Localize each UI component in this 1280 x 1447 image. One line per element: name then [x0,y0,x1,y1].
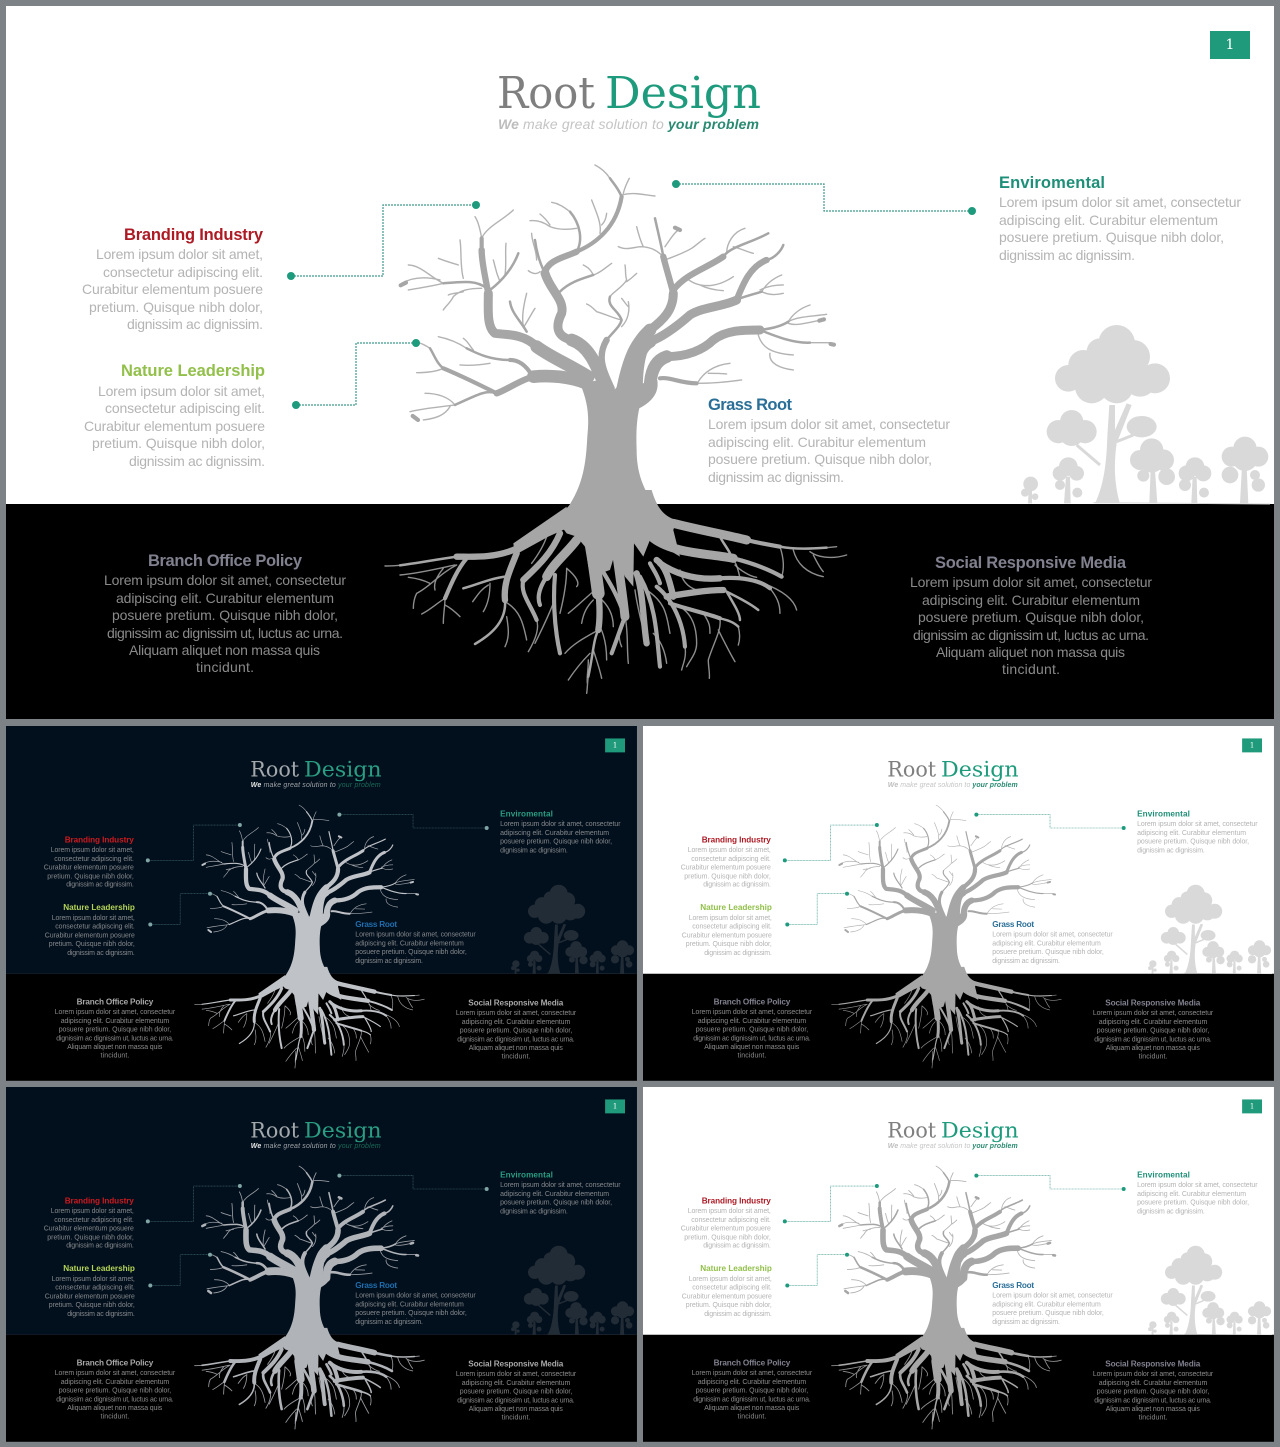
text block: Social Responsive Media: tincidunt. [502,1053,531,1060]
text block: Nature Leadership: consectetur adipiscing elit. [55,1285,135,1292]
text block: Grass Root: Lorem ipsum dolor sit amet, consectetur [355,1292,476,1299]
text block: Enviromental [1137,1171,1258,1215]
text block: Social Responsive Media: Aliquam aliquet non massa quis [469,1045,563,1052]
text block: Social Responsive Media: adipiscing elit. Curabitur elementum [462,1019,570,1026]
text block: Grass Root: adipiscing elit. Curabitur elementum [708,434,926,450]
text block: Nature Leadership: consectetur adipiscing elit. [105,400,265,416]
text block: Grass Root: adipiscing elit. Curabitur elementum [992,940,1101,947]
text block: Branch Office Policy [692,998,813,1059]
text block: Branch Office Policy: Branch Office Policy [148,552,303,570]
text block: Branding Industry: dignissim ac dignissim. [66,882,134,889]
text block: Branding Industry: dignissim ac dignissim. [127,316,263,332]
text block: Nature Leadership: Curabitur elementum posuere [84,418,265,434]
text block: Nature Leadership: Nature Leadership [63,903,135,912]
slide 5: white thumbnail, thick tree [643,1087,1274,1442]
text block: Nature Leadership: Curabitur elementum posuere [682,1293,772,1300]
page number badge: 1 [613,741,617,749]
text block: Social Responsive Media: posuere pretium. Quisque nibh dolor, [918,609,1144,625]
text block: Enviromental: Lorem ipsum dolor sit amet, consectetur [999,194,1241,210]
black soil band [6,1335,637,1442]
text block: Grass Root: dignissim ac dignissim. [355,1319,423,1326]
subtitle: We make great solution to your problem [251,1143,381,1150]
text block: Nature Leadership: Lorem ipsum dolor sit amet, [689,915,772,922]
title: Root [887,1119,936,1144]
text block: Grass Root: posuere pretium. Quisque nibh dolor, [992,949,1104,956]
connector: Branding Industry [146,1184,242,1223]
title: Design [605,68,761,119]
connector: Enviromental [974,1174,1126,1191]
text block: Nature Leadership: Lorem ipsum dolor sit amet, [98,383,265,399]
text block: Branding Industry: dignissim ac dignissim. [703,882,771,889]
title: Design [304,1119,382,1144]
text block: Enviromental [500,810,621,854]
text block: Branding Industry: Lorem ipsum dolor sit amet, [688,1208,771,1215]
text block: Branch Office Policy: Lorem ipsum dolor sit amet, consectetur [55,1370,176,1377]
text block: Social Responsive Media: Lorem ipsum dolor sit amet, consectetur [1093,1010,1214,1017]
text block: Enviromental: dignissim ac dignissim. [1137,847,1205,854]
text block: Nature Leadership: pretium. Quisque nibh dolor, [92,435,265,451]
text block: Enviromental: posuere pretium. Quisque nibh dolor, [999,229,1224,245]
text block: Branding Industry [681,835,771,889]
slide 2: dark thumbnail, thin tree [6,726,637,1081]
text block: Social Responsive Media: Social Responsive Media [935,554,1127,572]
text block: Nature Leadership: pretium. Quisque nibh dolor, [49,941,135,948]
text block: Branding Industry: pretium. Quisque nibh dolor, [684,1234,771,1241]
text block: Enviromental: Enviromental [500,810,553,819]
text block: Social Responsive Media: tincidunt. [1139,1053,1168,1060]
text block: Grass Root: Lorem ipsum dolor sit amet, consectetur [355,931,476,938]
text block: Enviromental: posuere pretium. Quisque nibh dolor, [1137,1199,1249,1206]
text block: Branding Industry: dignissim ac dignissim. [703,1243,771,1250]
text block: Branding Industry: Lorem ipsum dolor sit amet, [688,847,771,854]
text block: Enviromental: adipiscing elit. Curabitur elementum [1137,830,1246,837]
text block: Branch Office Policy: Lorem ipsum dolor sit amet, consectetur [55,1009,176,1016]
text block: Branding Industry: Branding Industry [702,1196,771,1205]
text block: Branding Industry: pretium. Quisque nibh dolor, [47,873,134,880]
text block: Grass Root: adipiscing elit. Curabitur elementum [355,940,464,947]
text block: Social Responsive Media: tincidunt. [1139,1414,1168,1421]
text block: Grass Root: dignissim ac dignissim. [708,469,844,485]
text block: Grass Root: posuere pretium. Quisque nibh dolor, [708,451,932,467]
text block: Branding Industry: Lorem ipsum dolor sit amet, [96,246,263,262]
text block: Enviromental: Enviromental [500,1171,553,1180]
text block: Enviromental: posuere pretium. Quisque nibh dolor, [1137,838,1249,845]
text block: Nature Leadership: Curabitur elementum posuere [45,1293,135,1300]
text block: Nature Leadership [682,903,772,957]
text block: Social Responsive Media [910,554,1152,677]
text block: Nature Leadership: dignissim ac dignissim. [67,1311,135,1318]
text block: Branch Office Policy: tincidunt. [101,1413,129,1420]
text block: Social Responsive Media: tincidunt. [1002,661,1060,677]
slide background [6,1087,637,1335]
main tree with roots [385,165,847,693]
page number badge: 1 [1226,37,1234,53]
text block: Branding Industry: consectetur adipiscing elit. [103,264,263,280]
text block: Enviromental: Enviromental [1137,810,1190,819]
text block: Branding Industry: pretium. Quisque nibh dolor, [89,299,263,315]
text block: Branch Office Policy: adipiscing elit. Curabitur elementum [61,1018,169,1025]
text block: Grass Root [992,1281,1113,1326]
background small trees [511,885,635,974]
text block: Grass Root [992,920,1113,965]
text block: Grass Root: posuere pretium. Quisque nibh dolor, [992,1310,1104,1317]
text block: Branch Office Policy: Aliquam aliquet non massa quis [129,642,320,658]
text block: Branch Office Policy: tincidunt. [101,1052,129,1059]
text block: Grass Root: dignissim ac dignissim. [355,958,423,965]
text block: Enviromental: adipiscing elit. Curabitur elementum [999,212,1218,228]
text block: Branch Office Policy: adipiscing elit. Curabitur elementum [698,1379,806,1386]
text block: Branch Office Policy: Branch Office Policy [77,1359,154,1368]
text block: Branch Office Policy: dignissim ac dignissim ut, luctus ac urna. [693,1035,811,1042]
background small trees [1148,1246,1272,1335]
text block: Grass Root: Lorem ipsum dolor sit amet, consectetur [992,1292,1113,1299]
black soil band [643,974,1274,1081]
text block: Nature Leadership: Lorem ipsum dolor sit amet, [52,915,135,922]
text block: Social Responsive Media: Lorem ipsum dolor sit amet, consectetur [910,574,1152,590]
text block: Social Responsive Media: posuere pretium. Quisque nibh dolor, [460,1028,572,1035]
text block: Branding Industry: Lorem ipsum dolor sit amet, [51,1208,134,1215]
text block: Enviromental: dignissim ac dignissim. [1137,1208,1205,1215]
title: Root [887,758,936,783]
text block: Nature Leadership: pretium. Quisque nibh dolor, [686,941,772,948]
slide 1: large white slide [6,6,1274,719]
title: Root [497,68,595,119]
text block: Enviromental [500,1171,621,1215]
text block: Enviromental: dignissim ac dignissim. [500,1208,568,1215]
text block: Branch Office Policy: tincidunt. [738,1413,766,1420]
connector: Branding Industry [783,1184,879,1223]
text block: Social Responsive Media: Lorem ipsum dolor sit amet, consectetur [456,1010,577,1017]
text block: Grass Root: posuere pretium. Quisque nibh dolor, [355,949,467,956]
page number badge: 1 [1250,741,1254,749]
black soil band [643,1335,1274,1442]
text block: Nature Leadership: dignissim ac dignissim. [129,453,265,469]
subtitle: We make great solution to your problem [888,1143,1018,1150]
text block: Branch Office Policy: dignissim ac dignissim ut, luctus ac urna. [56,1035,174,1042]
title [887,758,1019,783]
title [497,68,761,119]
page number badge [605,738,625,752]
slide 3: white thumbnail, thin tree [643,726,1274,1081]
main tree with roots [832,805,1061,1068]
title [887,1119,1019,1144]
page number badge [605,1099,625,1113]
text block: Nature Leadership: dignissim ac dignissim. [704,950,772,957]
text block: Social Responsive Media: Aliquam aliquet non massa quis [469,1406,563,1413]
text block: Nature Leadership: Curabitur elementum posuere [682,932,772,939]
text block: Enviromental: Lorem ipsum dolor sit amet, consectetur [500,821,621,828]
text block: Nature Leadership: Curabitur elementum posuere [45,932,135,939]
text block: Branch Office Policy: dignissim ac dignissim ut, luctus ac urna. [56,1396,174,1403]
main tree with roots [832,1166,1061,1429]
title: Design [304,758,382,783]
main tree with roots [195,1166,424,1429]
connector: Enviromental [337,813,489,830]
text block: Branch Office Policy: Branch Office Policy [714,998,791,1007]
text block: Social Responsive Media [456,999,577,1060]
text block: Enviromental: Lorem ipsum dolor sit amet, consectetur [1137,1182,1258,1189]
text block: Branch Office Policy: Lorem ipsum dolor sit amet, consectetur [104,572,346,588]
text block: Grass Root [355,1281,476,1326]
text block: Branch Office Policy: adipiscing elit. Curabitur elementum [61,1379,169,1386]
text block: Enviromental: Lorem ipsum dolor sit amet, consectetur [500,1182,621,1189]
title [250,1119,382,1144]
text block: Branding Industry: Branding Industry [65,835,134,844]
text block: Social Responsive Media: posuere pretium. Quisque nibh dolor, [460,1389,572,1396]
text block: Grass Root: dignissim ac dignissim. [992,958,1060,965]
page number badge: 1 [1250,1102,1254,1110]
text block: Enviromental: posuere pretium. Quisque nibh dolor, [500,1199,612,1206]
text block: Enviromental: posuere pretium. Quisque nibh dolor, [500,838,612,845]
text block: Grass Root: Lorem ipsum dolor sit amet, consectetur [992,931,1113,938]
text block: Branch Office Policy: Aliquam aliquet non massa quis [67,1044,163,1051]
text block: Branch Office Policy: adipiscing elit. Curabitur elementum [698,1018,806,1025]
text block: Branding Industry [82,226,264,332]
text block: Social Responsive Media: dignissim ac dignissim ut, luctus ac urna. [913,627,1149,643]
slide 4: dark thumbnail, thick tree [6,1087,637,1442]
text block: Nature Leadership: dignissim ac dignissim. [704,1311,772,1318]
text block: Branch Office Policy [692,1359,813,1420]
text block: Branding Industry: Curabitur elementum posuere [681,1225,771,1232]
text block: Branding Industry: Curabitur elementum posuere [681,864,771,871]
title [250,758,382,783]
text block: Branding Industry: Branding Industry [65,1196,134,1205]
text block: Social Responsive Media [1093,1360,1214,1421]
text block: Nature Leadership: consectetur adipiscing elit. [692,1285,772,1292]
text block: Grass Root: Grass Root [992,1281,1034,1290]
text block: Nature Leadership [682,1264,772,1318]
text block: Branch Office Policy: dignissim ac dignissim ut, luctus ac urna. [693,1396,811,1403]
text block: Social Responsive Media: posuere pretium. Quisque nibh dolor, [1097,1389,1209,1396]
text block: Branch Office Policy: dignissim ac dignissim ut, luctus ac urna. [107,625,343,641]
page number badge [1210,31,1250,59]
connector: Branding Industry [287,201,480,280]
title: Root [250,758,299,783]
text block: Nature Leadership: dignissim ac dignissim. [67,950,135,957]
slide background [6,6,1274,504]
text block: Grass Root: posuere pretium. Quisque nibh dolor, [355,1310,467,1317]
text block: Branding Industry: consectetur adipiscing elit. [691,1217,771,1224]
text block: Social Responsive Media: Social Responsive Media [468,999,564,1008]
text block: Grass Root: adipiscing elit. Curabitur elementum [992,1301,1101,1308]
text block: Social Responsive Media: adipiscing elit. Curabitur elementum [922,592,1140,608]
text block: Social Responsive Media: dignissim ac dignissim ut, luctus ac urna. [457,1397,575,1404]
text block: Branch Office Policy: posuere pretium. Quisque nibh dolor, [59,1027,171,1034]
text block: Branch Office Policy: adipiscing elit. Curabitur elementum [116,590,334,606]
text block: Branch Office Policy: Lorem ipsum dolor sit amet, consectetur [692,1009,813,1016]
title: Design [941,758,1019,783]
text block: Nature Leadership [84,362,265,469]
connector: Enviromental [337,1174,489,1191]
text block: Social Responsive Media: adipiscing elit. Curabitur elementum [462,1380,570,1387]
text block: Enviromental: dignissim ac dignissim. [999,247,1135,263]
text block: Branding Industry: consectetur adipiscing elit. [54,856,134,863]
connector: Branding Industry [783,823,879,862]
text block: Social Responsive Media: adipiscing elit. Curabitur elementum [1099,1019,1207,1026]
text block: Social Responsive Media: posuere pretium. Quisque nibh dolor, [1097,1028,1209,1035]
text block: Social Responsive Media: Aliquam aliquet non massa quis [1106,1045,1200,1052]
subtitle: We make great solution to your problem [251,782,381,789]
text block: Branding Industry: Branding Industry [702,835,771,844]
text block: Nature Leadership: Lorem ipsum dolor sit amet, [689,1276,772,1283]
text block: Grass Root [708,396,950,485]
text block: Social Responsive Media: Social Responsive Media [468,1360,564,1369]
text block: Branding Industry: Curabitur elementum posuere [82,281,263,297]
text block: Enviromental: Lorem ipsum dolor sit amet, consectetur [1137,821,1258,828]
connector: Nature Leadership [785,1253,849,1288]
subtitle: We make great solution to your problem [888,782,1018,789]
text block: Social Responsive Media: Lorem ipsum dolor sit amet, consectetur [456,1371,577,1378]
text block: Branding Industry: consectetur adipiscing elit. [691,856,771,863]
text block: Social Responsive Media: Aliquam aliquet non massa quis [1106,1406,1200,1413]
text block: Branch Office Policy: Aliquam aliquet non massa quis [67,1405,163,1412]
text block: Enviromental: Enviromental [999,174,1105,192]
text block: Branch Office Policy: tincidunt. [738,1052,766,1059]
black soil band [6,974,637,1081]
text block: Grass Root: adipiscing elit. Curabitur elementum [355,1301,464,1308]
text block: Branch Office Policy: Lorem ipsum dolor sit amet, consectetur [692,1370,813,1377]
text block: Social Responsive Media: tincidunt. [502,1414,531,1421]
text block: Branch Office Policy: Aliquam aliquet non massa quis [704,1405,800,1412]
text block: Branding Industry [681,1196,771,1250]
text block: Branding Industry: consectetur adipiscing elit. [54,1217,134,1224]
text block: Branding Industry: Curabitur elementum posuere [44,1225,134,1232]
connector: Nature Leadership [148,892,212,927]
text block: Branding Industry [44,835,134,889]
text block: Branch Office Policy [55,998,176,1059]
text block: Grass Root: Grass Root [992,920,1034,929]
text block: Nature Leadership: pretium. Quisque nibh dolor, [49,1302,135,1309]
title: Design [941,1119,1019,1144]
text block: Enviromental: Enviromental [1137,1171,1190,1180]
text block: Social Responsive Media: dignissim ac dignissim ut, luctus ac urna. [1094,1036,1212,1043]
text block: Branch Office Policy: posuere pretium. Quisque nibh dolor, [696,1027,808,1034]
page number badge [1242,738,1262,752]
text block: Branding Industry [44,1196,134,1250]
text block: Social Responsive Media: adipiscing elit. Curabitur elementum [1099,1380,1207,1387]
text block: Nature Leadership: consectetur adipiscing elit. [692,924,772,931]
page number badge: 1 [613,1102,617,1110]
slide background [6,726,637,974]
text block: Grass Root: Grass Root [355,1281,397,1290]
connector: Branding Industry [146,823,242,862]
text block: Social Responsive Media: Lorem ipsum dolor sit amet, consectetur [1093,1371,1214,1378]
text block: Branding Industry: Branding Industry [124,226,264,244]
connector: Enviromental [974,813,1126,830]
text block: Social Responsive Media: dignissim ac dignissim ut, luctus ac urna. [1094,1397,1212,1404]
text block: Branding Industry: Curabitur elementum posuere [44,864,134,871]
text block: Grass Root: dignissim ac dignissim. [992,1319,1060,1326]
text block: Grass Root: Grass Root [355,920,397,929]
text block: Nature Leadership: pretium. Quisque nibh dolor, [686,1302,772,1309]
text block: Grass Root: Grass Root [708,396,792,414]
text block: Social Responsive Media [456,1360,577,1421]
text block: Branch Office Policy: tincidunt. [196,659,254,675]
connector: Nature Leadership [148,1253,212,1288]
text block: Enviromental: adipiscing elit. Curabitur elementum [500,830,609,837]
connector: Nature Leadership [292,339,420,409]
text block: Nature Leadership [45,1264,135,1318]
text block: Nature Leadership [45,903,135,957]
page number badge [1242,1099,1262,1113]
subtitle: We make great solution to your problem [498,116,759,132]
slide background [643,1087,1274,1335]
text block: Branch Office Policy [55,1359,176,1420]
connector: Nature Leadership [785,892,849,927]
text block: Nature Leadership: Nature Leadership [700,903,772,912]
text block: Branch Office Policy: posuere pretium. Quisque nibh dolor, [112,607,338,623]
text block: Nature Leadership: consectetur adipiscing elit. [55,924,135,931]
title: Root [250,1119,299,1144]
main tree with roots [195,805,424,1068]
text block: Branch Office Policy: posuere pretium. Quisque nibh dolor, [59,1388,171,1395]
background small trees [1021,325,1270,504]
text block: Social Responsive Media: Social Responsive Media [1105,1360,1201,1369]
slide background [643,726,1274,974]
text block: Branch Office Policy: Branch Office Policy [714,1359,791,1368]
text block: Grass Root: Lorem ipsum dolor sit amet, consectetur [708,416,950,432]
text block: Branch Office Policy: Aliquam aliquet non massa quis [704,1044,800,1051]
text block: Enviromental [1137,810,1258,854]
text block: Nature Leadership: Nature Leadership [63,1264,135,1273]
text block: Enviromental [999,174,1241,263]
text block: Branding Industry: pretium. Quisque nibh dolor, [684,873,771,880]
text block: Nature Leadership: Nature Leadership [121,362,265,380]
text block: Branding Industry: dignissim ac dignissim. [66,1243,134,1250]
text block: Social Responsive Media: dignissim ac dignissim ut, luctus ac urna. [457,1036,575,1043]
text block: Enviromental: adipiscing elit. Curabitur elementum [500,1191,609,1198]
text block: Enviromental: adipiscing elit. Curabitur elementum [1137,1191,1246,1198]
text block: Nature Leadership: Nature Leadership [700,1264,772,1273]
text block: Branding Industry: Lorem ipsum dolor sit amet, [51,847,134,854]
black soil band [6,504,1274,719]
text block: Social Responsive Media: Social Responsive Media [1105,999,1201,1008]
background small trees [1148,885,1272,974]
text block: Nature Leadership: Lorem ipsum dolor sit amet, [52,1276,135,1283]
text block: Branding Industry: pretium. Quisque nibh dolor, [47,1234,134,1241]
text block: Social Responsive Media: Aliquam aliquet non massa quis [936,644,1125,660]
text block: Enviromental: dignissim ac dignissim. [500,847,568,854]
text block: Social Responsive Media [1093,999,1214,1060]
connector: Enviromental [672,180,976,215]
text block: Branch Office Policy: Branch Office Policy [77,998,154,1007]
text block: Branch Office Policy [104,552,346,675]
background small trees [511,1246,635,1335]
text block: Branch Office Policy: posuere pretium. Quisque nibh dolor, [696,1388,808,1395]
text block: Grass Root [355,920,476,965]
